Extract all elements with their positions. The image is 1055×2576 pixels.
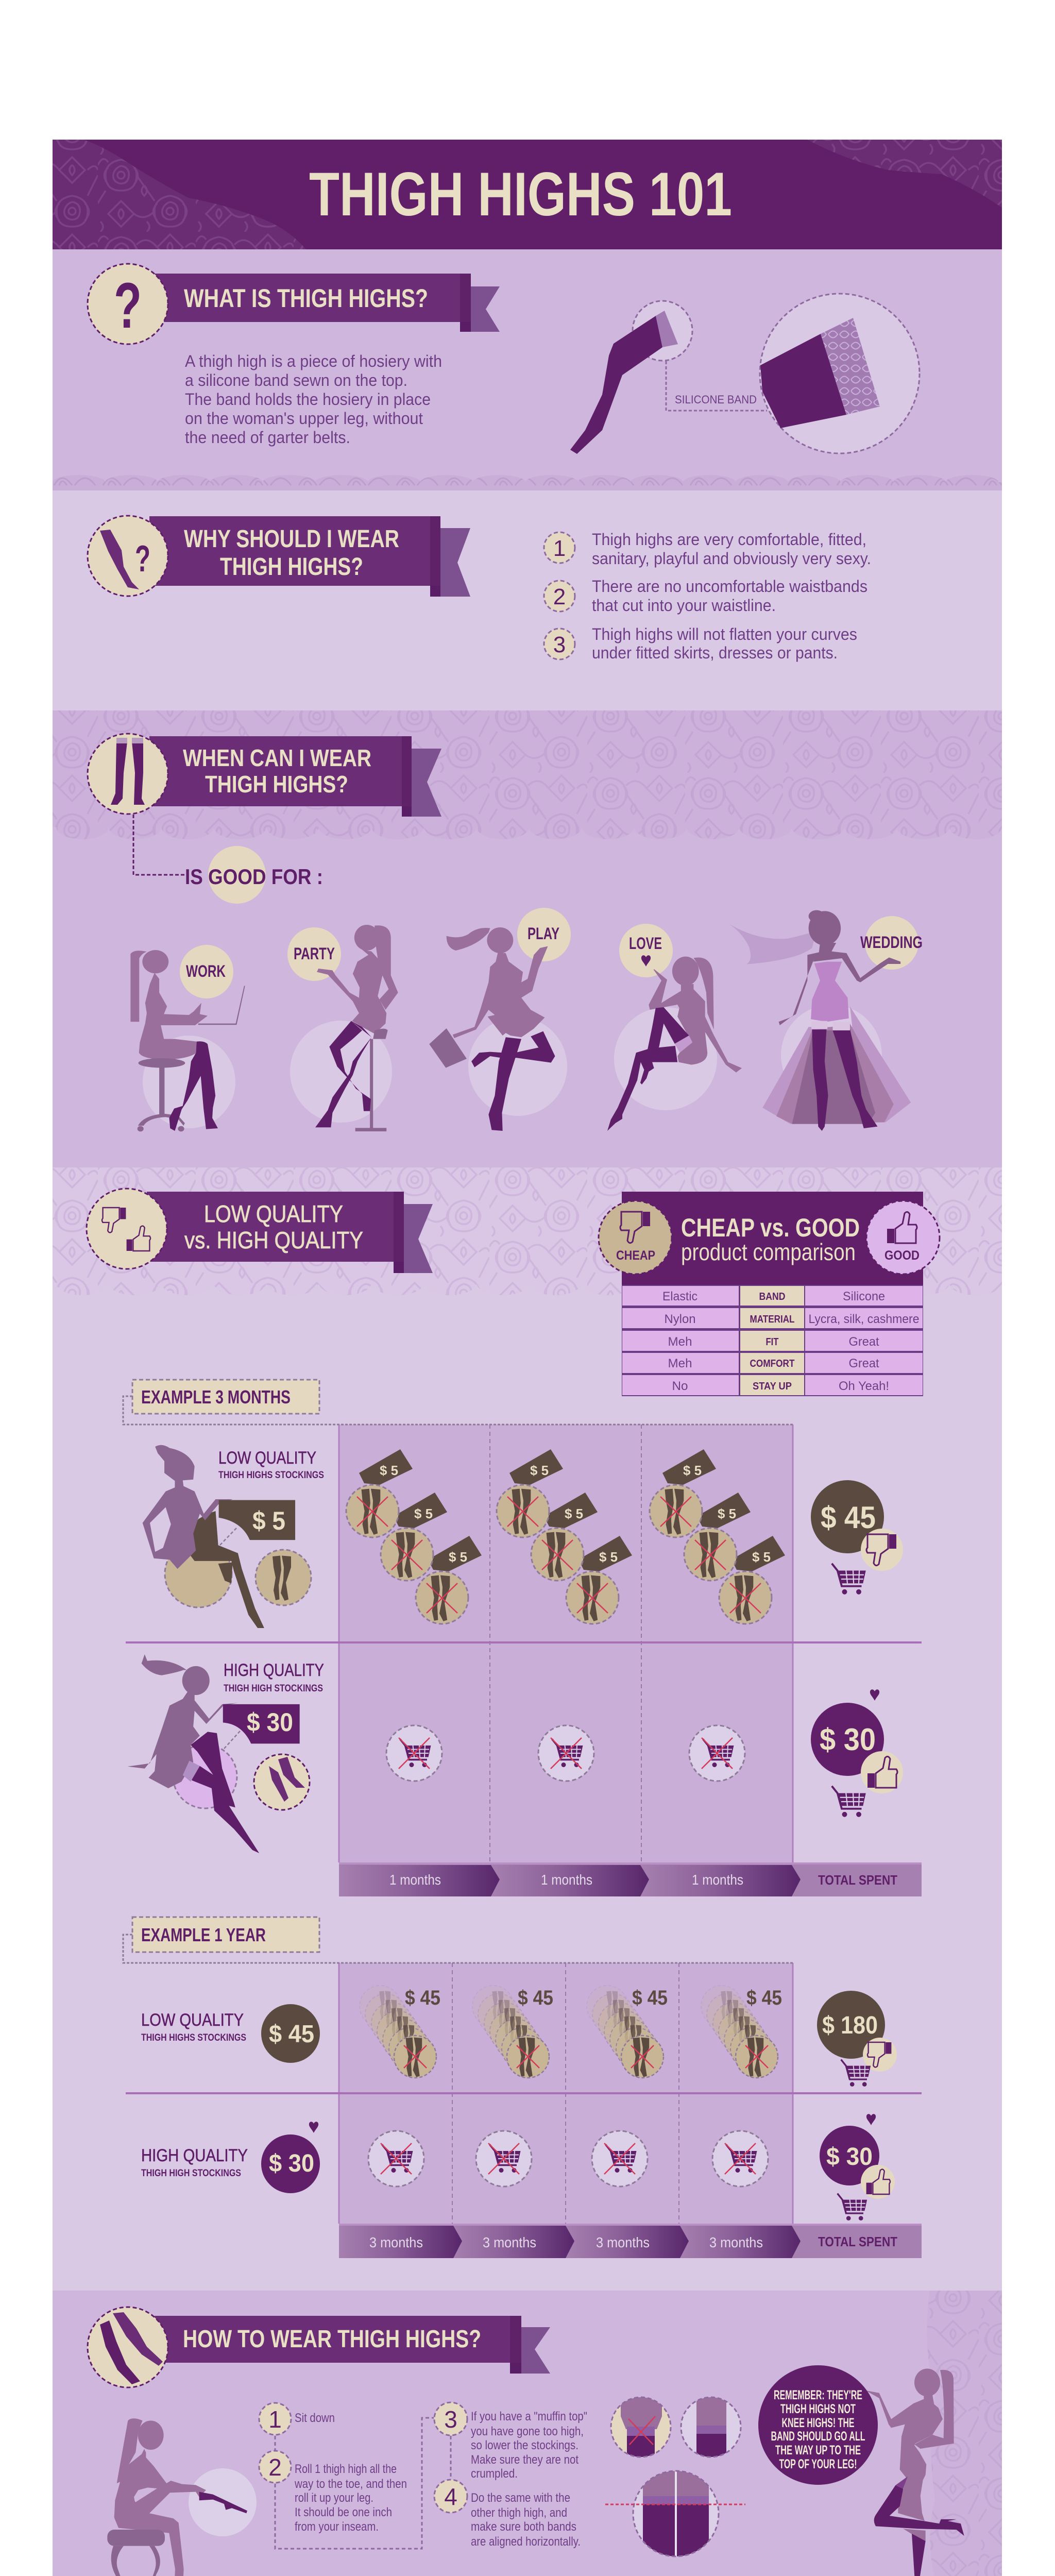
timeline bar: 1 months: TOTAL SPENT	[818, 1872, 897, 1888]
figure: party: PARTY	[294, 944, 335, 963]
list: reasons: Thigh highs are very comfortable, fitted,	[592, 530, 866, 549]
row: low quality one year	[141, 2004, 320, 2063]
subheading: is good for: IS GOOD FOR :	[185, 865, 323, 889]
row: low quality model: THIGH HIGHS STOCKINGS	[218, 1470, 324, 1481]
steps: how to put on: you have gone too high,	[471, 2425, 584, 2438]
body text: definition: the need of garter belts.	[185, 428, 350, 447]
chart: example 3 months	[123, 1380, 922, 1896]
steps: how to put on: Do the same with the	[471, 2491, 570, 2505]
steps: how to put on: It should be one inch	[295, 2505, 392, 2519]
steps: how to put on: Sit down	[295, 2411, 335, 2425]
panel: low vs high quality	[53, 1167, 1002, 2291]
table: cheap vs good comparison: GOOD	[884, 1248, 920, 1263]
heading ribbon: when: THIGH HIGHS?	[205, 771, 348, 798]
steps: how to put on: 3	[444, 2406, 457, 2433]
timeline bar: 1 months	[339, 1862, 922, 1896]
row: low quality model: $ 5	[252, 1506, 285, 1535]
heading ribbon: why	[88, 516, 470, 597]
steps: how to put on: way to the toe, and then	[294, 2477, 407, 2491]
heading ribbon: low vs high	[87, 1189, 433, 1273]
total: high quality one year 30	[820, 2114, 895, 2221]
list: reasons: 2	[553, 584, 566, 609]
tags and crossed stockings: month 3: $ 5	[683, 1463, 702, 1478]
row: high quality one year: HIGH QUALITY	[141, 2146, 248, 2165]
tags and crossed stockings: month 2: $ 5	[565, 1506, 583, 1521]
table: cheap vs good comparison: Lycra, silk, cashmere	[809, 1312, 919, 1326]
row: high quality model: HIGH QUALITY	[224, 1660, 324, 1680]
total: low quality 45	[811, 1480, 903, 1595]
row: low quality one year: LOW QUALITY	[141, 2010, 244, 2030]
tags and crossed stockings: month 3: $ 5	[752, 1549, 771, 1565]
row: high quality one year: THIGH HIGH STOCKINGS	[141, 2168, 241, 2179]
steps: how to put on: make sure both bands	[471, 2520, 576, 2534]
table: cheap vs good comparison	[599, 1192, 940, 1396]
body text: definition: on the woman's upper leg, without	[185, 409, 423, 428]
table: cheap vs good comparison: Meh	[668, 1357, 692, 1370]
stocking stacks: four quarters: $ 45	[746, 1987, 782, 2009]
tags and crossed stockings: month 2: $ 5	[599, 1549, 618, 1565]
tags and crossed stockings: month 1: $ 5	[449, 1549, 467, 1565]
table: cheap vs good comparison: CHEAP	[616, 1248, 655, 1263]
figure: wedding	[729, 910, 923, 1131]
table: cheap vs good comparison: Meh	[668, 1335, 692, 1349]
callout: remember: TOP OF YOUR LEG!	[779, 2457, 857, 2471]
steps: how to put on: If you have a "muffin top"	[471, 2410, 587, 2424]
table: cheap vs good comparison: Nylon	[665, 1312, 695, 1326]
row: low quality model	[143, 1445, 324, 1628]
body text: definition: A thigh high is a piece of hosiery with	[185, 352, 442, 370]
heading ribbon: how to: HOW TO WEAR THIGH HIGHS?	[183, 2326, 481, 2353]
table: cheap vs good comparison: Great	[849, 1357, 879, 1370]
timeline bar: 3 months: 3 months	[596, 2234, 650, 2250]
timeline bar: 3 months	[339, 2224, 922, 2258]
stocking stacks: four quarters	[360, 1986, 782, 2078]
steps: how to put on: 1	[268, 2406, 282, 2433]
figure: love: LOVE	[629, 934, 662, 953]
body text: definition: a silicone band sewn on the top.	[185, 371, 407, 389]
panel: when can I wear	[53, 710, 1002, 1168]
heading ribbon: when: WHEN CAN I WEAR	[183, 744, 371, 771]
tags and crossed stockings: month 1: $ 5	[380, 1463, 398, 1478]
row: high quality one year	[141, 2122, 320, 2193]
table: cheap vs good comparison: MATERIAL	[750, 1314, 794, 1325]
heading ribbon: how to	[88, 2307, 550, 2387]
body text: definition: The band holds the hosiery in place	[185, 390, 431, 409]
list: reasons: sanitary, playful and obviously very sexy.	[592, 549, 871, 568]
steps: how to put on: 4	[444, 2483, 457, 2510]
row: high quality model: $ 30	[247, 1708, 293, 1737]
row: high quality model: THIGH HIGH STOCKINGS	[224, 1683, 323, 1694]
tags and crossed stockings: month 2	[497, 1449, 632, 1624]
icon: leg with silicone band detail: SILICONE BAND	[675, 393, 757, 406]
heading ribbon: when	[88, 734, 441, 817]
tags and crossed stockings: month 1	[346, 1449, 482, 1624]
row: low quality one year: THIGH HIGHS STOCKINGS	[141, 2032, 246, 2043]
heading ribbon: what is	[88, 264, 500, 344]
list: reasons: under fitted skirts, dresses or pants.	[592, 643, 838, 662]
figure: work: WORK	[186, 962, 226, 980]
table: cheap vs good comparison: product comparison	[681, 1239, 856, 1265]
heading ribbon: why: WHY SHOULD I WEAR	[184, 526, 399, 553]
total: high quality one year 30: $ 30	[826, 2143, 873, 2171]
list: reasons: that cut into your waistline.	[592, 596, 776, 615]
figure: party	[287, 925, 398, 1131]
table: cheap vs good comparison: Elastic	[662, 1290, 697, 1303]
timeline bar: 3 months: 3 months	[369, 2234, 423, 2250]
steps: how to put on: so lower the stockings.	[471, 2438, 578, 2452]
table: cheap vs good comparison: COMFORT	[750, 1358, 794, 1369]
panel: why should I wear	[53, 490, 1002, 710]
steps: how to put on: crumpled.	[471, 2467, 518, 2481]
tags and crossed stockings: month 3	[650, 1449, 785, 1624]
heading ribbon: why: ?	[135, 538, 150, 580]
row: high quality one year: $ 30	[269, 2150, 314, 2177]
steps: how to put on: roll it up your leg.	[295, 2491, 373, 2505]
table: cheap vs good comparison: BAND	[759, 1291, 785, 1302]
total: low quality 45: $ 45	[821, 1500, 876, 1535]
steps: how to put on: Make sure they are not	[471, 2453, 578, 2467]
chart: example 1 year	[123, 1917, 922, 2258]
table: cheap vs good comparison: Oh Yeah!	[839, 1379, 889, 1393]
table: cheap vs good comparison: No	[672, 1379, 688, 1393]
panel: what is thigh highs	[53, 249, 1002, 490]
timeline bar: 1 months: 1 months	[541, 1872, 592, 1888]
figure: standing woman	[865, 2368, 964, 2576]
figure: love	[607, 924, 742, 1131]
list: reasons: 1	[553, 536, 566, 561]
steps: how to put on: are aligned horizontally.	[471, 2535, 581, 2549]
heading ribbon: low vs high: vs. HIGH QUALITY	[184, 1227, 363, 1253]
timeline bar: 1 months: 1 months	[692, 1872, 743, 1888]
label: example 3 months: EXAMPLE 3 MONTHS	[141, 1386, 291, 1408]
label: example 3 months	[132, 1380, 319, 1414]
table: cheap vs good comparison: Great	[849, 1335, 879, 1349]
figure: play	[429, 908, 571, 1131]
row: high quality model	[128, 1654, 324, 1853]
row: low quality one year: $ 45	[269, 2021, 314, 2048]
panel: how to wear	[53, 2291, 1002, 2576]
figure: work	[130, 945, 245, 1131]
crossed carts: months 1 to 3	[386, 1725, 745, 1781]
subheading: is good for	[133, 815, 323, 904]
heading ribbon: low vs high: LOW QUALITY	[204, 1200, 343, 1227]
callout: remember: THIGH HIGHS NOT	[780, 2402, 856, 2416]
total: high quality 30	[811, 1689, 903, 1817]
table: cheap vs good comparison: FIT	[765, 1336, 779, 1348]
table: cheap vs good comparison: STAY UP	[753, 1381, 792, 1392]
heading ribbon: why: THIGH HIGHS?	[220, 553, 363, 581]
timeline bar: 3 months: 3 months	[709, 2234, 763, 2250]
steps: how to put on: other thigh high, and	[471, 2506, 567, 2520]
list: reasons: Thigh highs will not flatten your curves	[592, 625, 857, 643]
callout: remember: BAND SHOULD GO ALL	[771, 2429, 865, 2444]
steps: how to put on: 2	[268, 2454, 282, 2481]
list: reasons: 3	[553, 632, 566, 657]
total: low quality 180	[817, 1991, 897, 2087]
figure: woman seated rolling stocking	[107, 2418, 257, 2576]
stocking stacks: four quarters: $ 45	[632, 1987, 668, 2009]
title: THIGH HIGHS 101	[309, 160, 732, 229]
timeline bar: 3 months: TOTAL SPENT	[818, 2234, 897, 2249]
row: low quality model: LOW QUALITY	[218, 1448, 316, 1468]
panel: header	[53, 140, 1002, 249]
heading ribbon: what is: WHAT IS THIGH HIGHS?	[184, 284, 428, 313]
total: high quality 30: $ 30	[820, 1722, 876, 1757]
tags and crossed stockings: month 3: $ 5	[718, 1506, 736, 1521]
timeline bar: 1 months: 1 months	[389, 1872, 441, 1888]
callout: remember: KNEE HIGHS! THE	[782, 2416, 854, 2430]
steps: how to put on: from your inseam.	[295, 2520, 379, 2534]
tags and crossed stockings: month 2: $ 5	[530, 1463, 549, 1478]
table: cheap vs good comparison: CHEAP vs. GOOD	[681, 1213, 860, 1242]
callout: remember: REMEMBER: THEY'RE	[774, 2388, 862, 2402]
icon: leg with silicone band detail	[570, 294, 920, 454]
body text: definition	[185, 352, 442, 447]
icons: band placement details	[605, 2396, 745, 2558]
total: low quality 180: $ 180	[822, 2012, 878, 2039]
figure: wedding: WEDDING	[860, 933, 923, 952]
stocking stacks: four quarters: $ 45	[405, 1987, 440, 2009]
table: cheap vs good comparison: Silicone	[843, 1290, 885, 1303]
steps: how to put on: Roll 1 thigh high all the	[295, 2462, 397, 2476]
label: example 1 year	[132, 1917, 319, 1952]
stocking stacks: four quarters: $ 45	[518, 1987, 553, 2009]
crossed carts: four quarters	[368, 2131, 768, 2187]
tags and crossed stockings: month 1: $ 5	[414, 1506, 433, 1521]
label: example 1 year: EXAMPLE 1 YEAR	[141, 1924, 266, 1945]
list: reasons	[544, 530, 871, 662]
list: reasons: There are no uncomfortable waistbands	[592, 577, 867, 596]
callout: remember: THE WAY UP TO THE	[775, 2443, 861, 2458]
timeline bar: 3 months: 3 months	[483, 2234, 536, 2250]
steps: how to put on	[259, 2402, 587, 2549]
figure: play: PLAY	[528, 924, 559, 943]
heading ribbon: what is: ?	[114, 270, 142, 342]
callout: remember	[758, 2365, 878, 2485]
